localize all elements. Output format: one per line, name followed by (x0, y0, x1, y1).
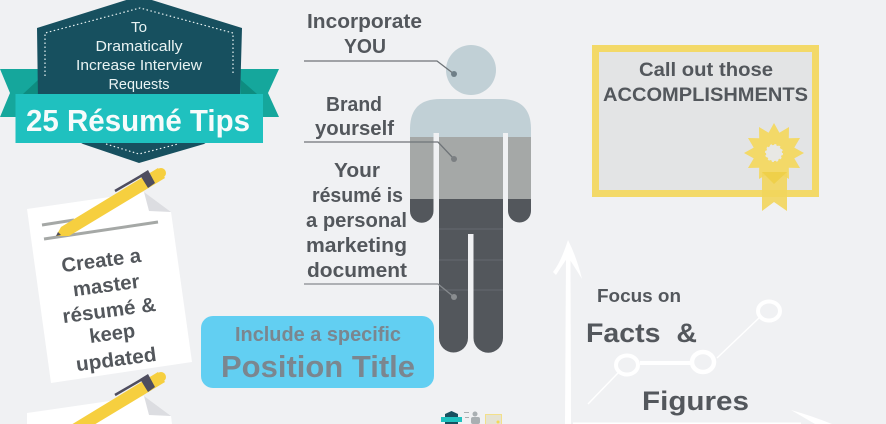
text: ACCOMPLISHMENTS (603, 85, 808, 106)
panel: second note cropped (27, 372, 172, 424)
label: Brand (326, 94, 382, 116)
mini person (464, 412, 480, 424)
panel: master resume note (27, 168, 192, 383)
text (221, 324, 415, 384)
note text: keep (88, 320, 136, 348)
text (603, 60, 808, 106)
dotted border (45, 8, 233, 154)
label: Your (334, 160, 380, 182)
callout: incorporate you (304, 11, 457, 77)
text: Position Title (221, 349, 415, 384)
callout: brand yourself (304, 94, 457, 162)
subtitle: Increase Interview (76, 57, 202, 74)
text: Include a specific (235, 324, 401, 346)
subtitle: Dramatically (96, 38, 183, 55)
note text (60, 245, 158, 376)
text: Call out those (639, 60, 773, 81)
note text: master (72, 271, 141, 301)
label: document (307, 260, 407, 282)
note text: Create a (60, 245, 143, 277)
icon: pencil (56, 372, 166, 424)
lower body (410, 199, 531, 353)
label: résumé is (312, 185, 403, 207)
text: Focus on (597, 286, 681, 306)
label: a personal (306, 210, 407, 232)
text (586, 286, 749, 416)
icon: pencil (56, 168, 166, 236)
mini certificate (486, 414, 502, 424)
head (446, 45, 496, 95)
page fold (144, 396, 171, 416)
text: Figures (642, 386, 749, 416)
title badge (0, 0, 279, 163)
hexagon badge (37, 0, 242, 163)
thumbnail preview (441, 411, 502, 424)
label (306, 160, 407, 282)
label: yourself (315, 118, 394, 140)
leader line (304, 61, 457, 77)
leader line (304, 142, 457, 162)
leader line (304, 284, 457, 300)
arm gaps (434, 133, 508, 223)
shoulders (410, 99, 531, 137)
figure: person (410, 45, 531, 353)
axes (553, 240, 832, 424)
subtitle: To (131, 19, 147, 36)
note text: updated (75, 344, 158, 376)
icon: seal (744, 123, 804, 211)
label (307, 11, 422, 58)
panel: certificate (596, 48, 816, 211)
paper (27, 192, 192, 383)
label: marketing (306, 235, 407, 257)
ribbon tails (0, 69, 279, 117)
label: Incorporate (307, 11, 422, 33)
label: YOU (344, 36, 386, 58)
callout: personal marketing document (304, 160, 457, 300)
subtitle: Requests (108, 76, 170, 93)
subtitle (76, 19, 202, 93)
text: Facts & (586, 318, 697, 348)
paper (27, 396, 172, 424)
page fold (144, 192, 171, 212)
banner (16, 94, 263, 143)
text lines (42, 220, 158, 239)
frame (596, 48, 816, 194)
chart: line graph (553, 240, 832, 424)
mini badge (441, 411, 462, 424)
data line (588, 302, 780, 404)
torso middle (410, 137, 531, 199)
note text: résumé & (61, 294, 157, 328)
label (315, 94, 394, 140)
box (201, 316, 434, 388)
heading: 25 Résumé Tips (26, 103, 250, 138)
panel: position title (201, 316, 434, 388)
